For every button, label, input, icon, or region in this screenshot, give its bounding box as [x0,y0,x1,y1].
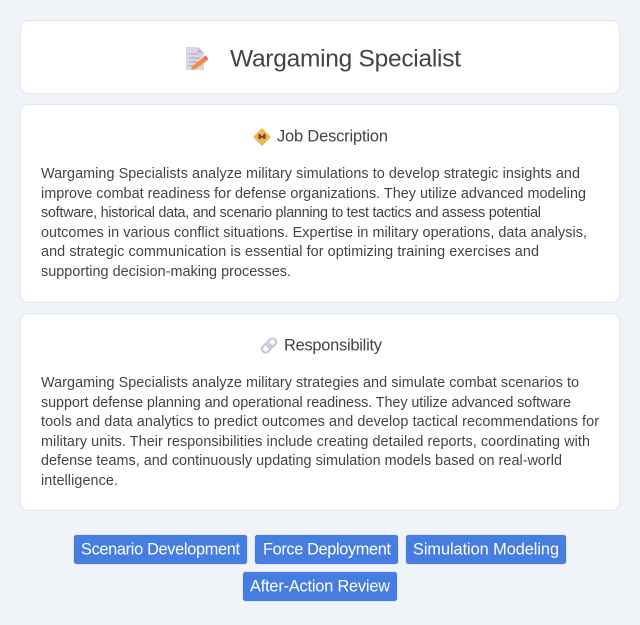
panel: title card [20,20,620,94]
tag list [74,534,566,602]
text block: job description [41,166,587,280]
text block: job description: software, historical data, and scenario planning to test tactics and assess potential [41,205,541,221]
text block: responsibility: military units. Their responsibilities include creating detailed reports, coordinating with [41,434,590,450]
tag: scenario development: Scenario Development [81,540,240,558]
text block: responsibility: Wargaming Specialists analyze military strategies and simulate combat scenarios to [41,375,579,391]
text block: responsibility: intelligence. [41,473,118,489]
title: Wargaming Specialist [230,46,461,72]
text block: responsibility: tools and data analytics to predict outcomes and develop tactical recommendations for [41,414,599,430]
text block: responsibility: support defense planning and operational readiness. They utilize advanced software [41,395,571,411]
text block: responsibility [41,375,599,489]
heading: job description: Job Description [277,128,388,146]
text block: responsibility: defense teams, and continuously updating simulation models based on real-world [41,453,562,469]
tag: simulation modeling: Simulation Modeling [413,540,559,558]
tag: after-action review [242,572,398,602]
panel: job description [20,104,620,302]
tag: after-action review: After-Action Review [250,578,390,596]
icon: chain link [260,337,278,354]
icon: document with pencil [186,47,208,70]
text block: job description: and strategic communication is essential for optimizing training exercises and [41,244,539,260]
panel: responsibility [20,314,620,510]
text block: job description: improve combat readiness for defense organizations. They utilize advanced modeling [41,186,586,202]
text block: job description: Wargaming Specialists analyze military simulations to develop strategic insights and [41,166,580,182]
text block: job description: supporting decision-making processes. [41,264,291,280]
tag: force deployment: Force Deployment [263,540,391,558]
heading: responsibility: Responsibility [284,336,383,354]
icon: diamond warning sign [254,129,270,145]
text block: job description: outcomes in various conflict situations. Expertise in military operations, data analysis, [41,225,587,241]
tag: scenario development [74,534,248,564]
tag: simulation modeling [406,534,566,564]
tag: force deployment [254,534,398,564]
